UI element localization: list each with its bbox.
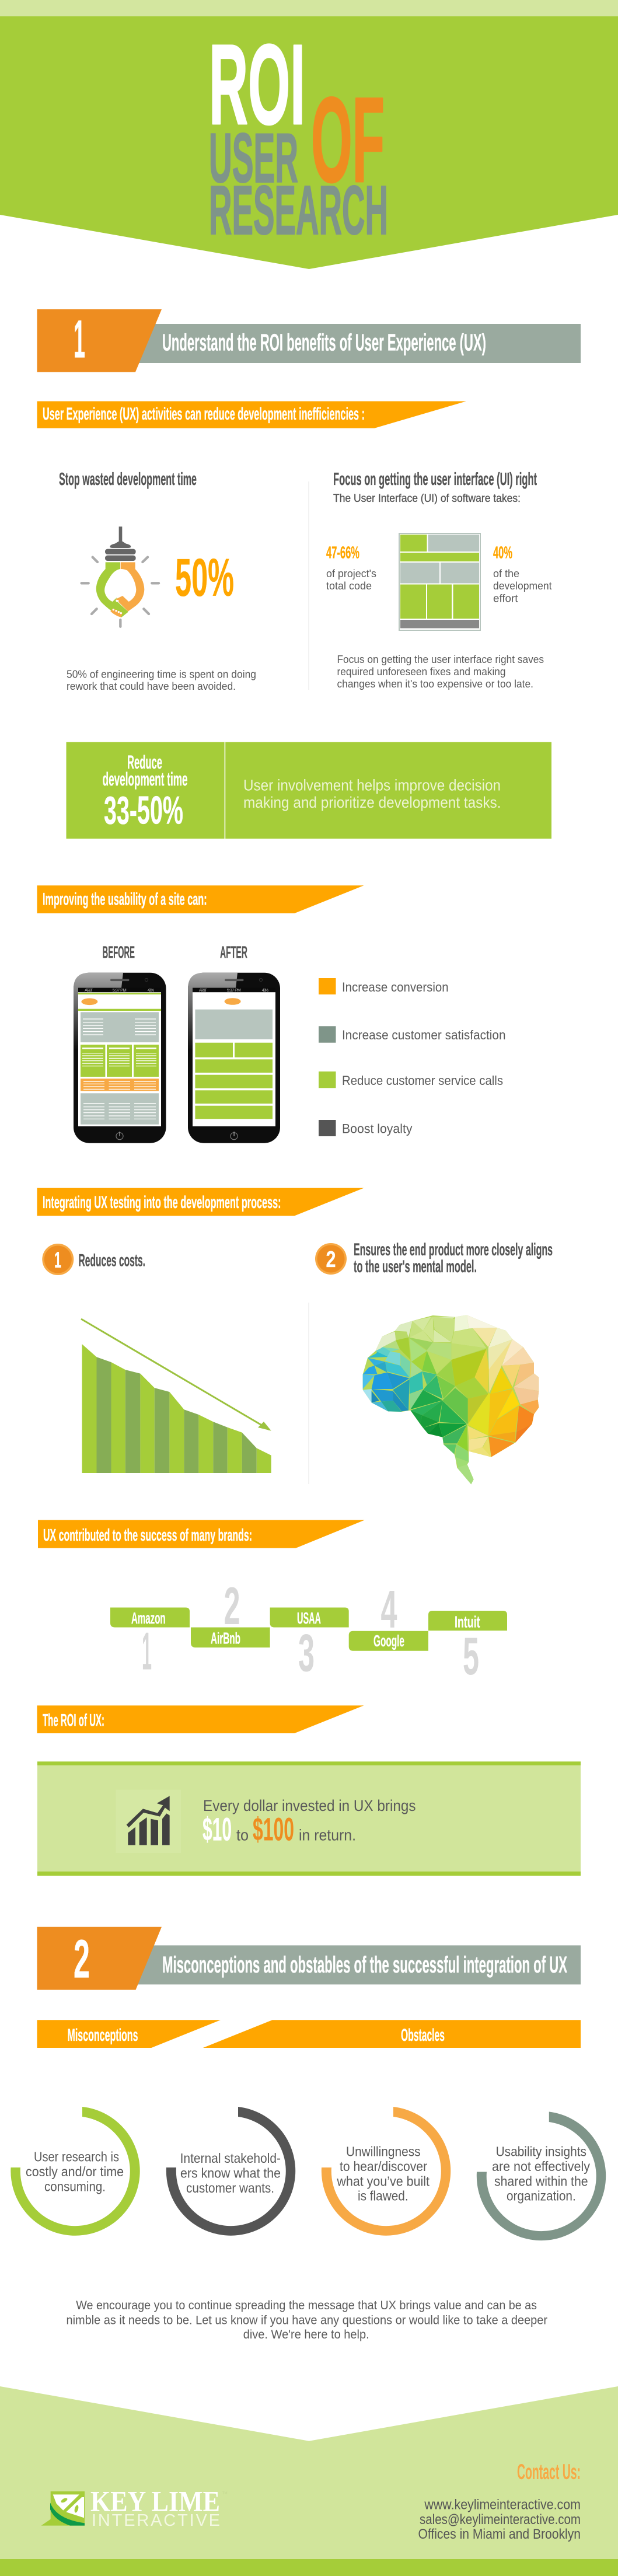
ring: user research costly: costly and/or time xyxy=(26,2164,124,2179)
ring: usability insights: Usability insights xyxy=(496,2144,586,2159)
phone: before: 5:37 PM xyxy=(113,987,127,993)
panel: ROI callout xyxy=(37,1761,581,1876)
text: BEFORE xyxy=(103,944,135,962)
rank 3: USAA xyxy=(270,1607,349,1683)
logo: Key Lime Interactive: TM xyxy=(222,2492,228,2495)
panel: focus on the user interface xyxy=(326,469,552,690)
legend: usability benefits: Reduce customer service calls xyxy=(342,1073,503,1088)
phone: after: 43% xyxy=(262,987,269,993)
ring: internal stakeholders: ers know what the xyxy=(180,2165,281,2180)
subheading: UI of software takes: The User Interface (UI) of software takes: xyxy=(333,493,521,505)
stat: 40% of effort: 40% xyxy=(493,544,512,563)
banner: usability xyxy=(37,885,364,913)
logo: Key Lime Interactive xyxy=(41,2485,228,2530)
text: UI saves fixes: Focus on getting the user interface right saves xyxy=(337,654,544,665)
phone: after: 5:37 PM xyxy=(227,987,241,993)
chart: declining costs xyxy=(81,1319,271,1473)
point 1: reduces costs xyxy=(42,1244,145,1275)
rank 3: USAA: USAA xyxy=(297,1609,321,1627)
contact block: Offices in Miami and Brooklyn xyxy=(418,2526,581,2542)
ranking: brands xyxy=(110,1577,507,1686)
footer band xyxy=(0,2386,618,2576)
rank 4: Google: Google xyxy=(373,1632,404,1650)
text: AFTER xyxy=(220,944,247,962)
banner: obstacles: Obstacles xyxy=(401,2026,445,2045)
banner: ROI of UX xyxy=(37,1705,364,1733)
panel: stop wasted development time xyxy=(59,469,256,692)
rank 5: Intuit: 5 xyxy=(463,1627,479,1686)
legend: usability benefits xyxy=(319,978,505,1136)
rank 4: Google: 4 xyxy=(380,1580,397,1639)
rank 3: USAA: 3 xyxy=(298,1624,315,1683)
ring: unwillingness: to hear/discover xyxy=(340,2159,427,2174)
banner: development inefficiencies xyxy=(37,402,466,428)
callout: reduce development time: 33-50% xyxy=(104,788,183,833)
contact block: sales@keylimeinteractive.com xyxy=(420,2512,581,2528)
legend: usability benefits: Increase customer satisfaction xyxy=(342,1028,505,1042)
rank 1: Amazon: 1 xyxy=(142,1622,152,1681)
point 1: reduces costs: Reduces costs. xyxy=(78,1251,145,1270)
closing text: dive. We're here to help. xyxy=(243,2328,369,2341)
legend: usability benefits: Increase conversion xyxy=(342,980,449,994)
stat: 47-66% of code: of project's xyxy=(326,568,376,580)
text: UI saves fixes: changes when it's too expensive or too late. xyxy=(337,678,533,690)
point 2: mental model: to the user's mental model. xyxy=(354,1257,477,1276)
rank 5: Intuit: Intuit xyxy=(455,1613,480,1631)
phone: before: 43% xyxy=(148,987,155,993)
ring: usability insights: organization. xyxy=(507,2188,576,2204)
banner: misconceptions: Misconceptions xyxy=(68,2026,138,2045)
logo: Key Lime Interactive: KEY LIME xyxy=(90,2485,220,2518)
text: UI saves fixes xyxy=(337,654,544,690)
banner: misconceptions xyxy=(37,2020,221,2048)
banner: brands xyxy=(38,1520,365,1548)
rank 2: AirBnb: 2 xyxy=(224,1577,240,1636)
rank 2: AirBnb: AirBnb xyxy=(211,1629,240,1647)
text: every dollar: $10 xyxy=(202,1811,232,1848)
ring: unwillingness: is flawed. xyxy=(358,2188,408,2204)
stat: 50%: 50% xyxy=(175,548,234,608)
rank 2: AirBnb xyxy=(191,1577,270,1647)
ring: usability insights xyxy=(477,2111,606,2240)
illustration: low-poly brain xyxy=(363,1315,539,1484)
callout: reduce development time: Reduce xyxy=(127,752,162,773)
diagram: UI wireframe xyxy=(399,533,480,630)
header banner xyxy=(0,0,618,269)
text: every dollar: to xyxy=(236,1827,249,1844)
text: engineering time: 50% of engineering time is spent on doing xyxy=(67,669,256,680)
section 1 header xyxy=(37,309,581,372)
stat: 40% of effort: development xyxy=(493,580,552,592)
stat: 40% of effort xyxy=(493,544,552,605)
text: every dollar: in return. xyxy=(299,1827,356,1844)
icon: growth chart xyxy=(116,1790,181,1853)
banner: integrating UX testing: Integrating UX testing into the development process: xyxy=(43,1193,281,1212)
closing text: nimble as it needs to be. Let us know if you have any questions or would like to take a deeper xyxy=(67,2313,547,2327)
callout: reduce development time: User involvement helps improve decision xyxy=(243,777,501,794)
text: UI saves fixes: required unforeseen fixes and making xyxy=(337,666,505,678)
point 2: mental model xyxy=(315,1240,553,1276)
closing text: We encourage you to continue spreading the message that UX brings value and can be as xyxy=(76,2299,537,2312)
heading: stop wasted: Stop wasted development time xyxy=(59,469,197,489)
callout: reduce development time: development time xyxy=(103,769,188,790)
rank 1: Amazon xyxy=(110,1607,190,1681)
legend: usability benefits: Boost loyalty xyxy=(342,1122,412,1136)
text: every dollar: Every dollar invested in UX brings xyxy=(203,1797,416,1814)
arrow: downward trend xyxy=(81,1319,271,1431)
logo: Key Lime Interactive: INTERACTIVE xyxy=(92,2511,220,2530)
point 1: reduces costs: 1 xyxy=(54,1248,61,1273)
text: OF xyxy=(311,72,385,207)
banner: obstacles xyxy=(203,2020,581,2048)
rank 5: Intuit xyxy=(428,1611,507,1686)
phone: after: AT&T xyxy=(199,987,207,993)
stat: 47-66% of code: total code xyxy=(326,580,372,592)
text: engineering time: rework that could have been avoided. xyxy=(67,680,236,692)
rank 4: Google xyxy=(349,1580,428,1651)
ring: internal stakeholders: customer wants. xyxy=(186,2180,274,2195)
callout: reduce development time xyxy=(67,742,551,839)
callout: reduce development time: making and prioritize development tasks. xyxy=(243,794,501,811)
text: every dollar: $100 xyxy=(253,1811,294,1848)
banner: usability: Improving the usability of a site can: xyxy=(43,890,207,909)
ring: user research costly xyxy=(11,2107,140,2236)
title xyxy=(209,21,388,249)
stat: 40% of effort: effort xyxy=(493,593,518,605)
icon: lime slice xyxy=(41,2491,85,2526)
title: ROI xyxy=(209,21,305,148)
banner: brands: UX contributed to the success of many brands: xyxy=(43,1526,252,1545)
title: USER xyxy=(209,119,298,197)
phone: before xyxy=(74,973,166,1143)
stat: 40% of effort: of the xyxy=(493,568,519,580)
icon: light bulb handshake xyxy=(82,526,159,627)
banner: ROI of UX: The ROI of UX: xyxy=(43,1711,104,1730)
section 2 header: 2 xyxy=(74,1928,90,1989)
point 2: mental model: 2 xyxy=(326,1247,336,1272)
section 2 header xyxy=(37,1927,581,1990)
ring: user research costly: consuming. xyxy=(44,2179,106,2194)
rank 1: Amazon: Amazon xyxy=(131,1609,166,1627)
banner: integrating UX testing xyxy=(37,1188,364,1216)
ring: usability insights: shared within the xyxy=(494,2174,588,2189)
text: RESEARCH xyxy=(209,172,388,249)
text: every dollar xyxy=(202,1797,416,1848)
divider xyxy=(308,1303,309,1484)
divider xyxy=(308,481,309,690)
closing text xyxy=(67,2299,547,2341)
stat: 47-66% of code: 47-66% xyxy=(326,544,359,563)
ring: internal stakeholders: Internal stakehold- xyxy=(180,2151,281,2166)
ring: unwillingness: what you’ve built xyxy=(336,2174,430,2189)
ring: internal stakeholders xyxy=(166,2107,295,2236)
text: engineering time xyxy=(67,669,256,692)
ring: usability insights: are not effectively xyxy=(492,2159,590,2174)
ring: unwillingness: Unwillingness xyxy=(346,2144,421,2159)
ring: unwillingness xyxy=(322,2107,451,2236)
contact block: www.keylimeinteractive.com xyxy=(424,2497,581,2513)
stat: 47-66% of code xyxy=(326,544,376,592)
section 1 header: 1 xyxy=(74,309,85,369)
phone: before: AT&T xyxy=(85,987,93,993)
phone: after xyxy=(188,973,280,1143)
contact block xyxy=(418,2460,581,2542)
ring: user research costly: User research is xyxy=(34,2149,119,2164)
